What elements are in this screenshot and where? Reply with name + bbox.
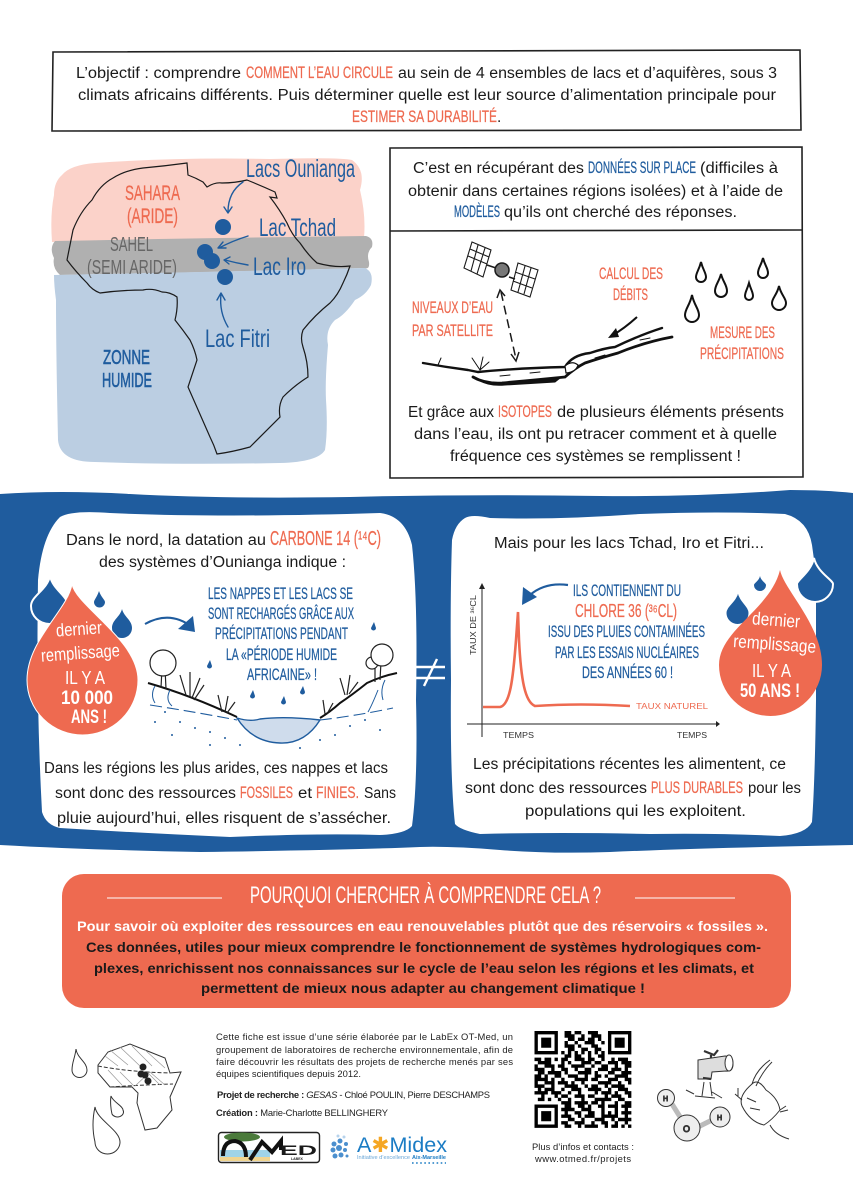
- panel: left card Ounianga: des systèmes d’Ounianga indique :: [99, 554, 346, 571]
- blue chlorine text: PAR LES ESSAIS NUCLÉAIRES: [555, 643, 699, 662]
- panel: right card chlorine: sont donc des ressources: [465, 780, 647, 797]
- panel: right card chlorine: Mais pour les lacs Tchad, Iro et Fitri...: [494, 535, 764, 552]
- illustration: river: [423, 328, 672, 385]
- panel: left card Ounianga: Sans: [364, 785, 396, 802]
- panel: right card chlorine: populations qui les exploitent.: [525, 803, 746, 820]
- icon: small Africa with drops: [72, 1044, 181, 1154]
- zone labels: (ARIDE): [127, 205, 178, 228]
- panel: left card Ounianga: FINIES.: [316, 783, 359, 802]
- icon: red drop: [719, 570, 822, 716]
- panel: data and models: fréquence ces systèmes se remplissent !: [450, 448, 741, 465]
- icon: red drop: IL Y A: [752, 661, 791, 681]
- blue humid zone: [54, 268, 372, 464]
- logo: A*Midex: A✱Midex: [357, 1134, 447, 1157]
- logo: A*Midex: [330, 1134, 447, 1163]
- icon: tap, water molecule and root: [658, 1050, 789, 1141]
- panel: why understand: [62, 874, 791, 1008]
- icon: red drop: remplissage: [40, 640, 120, 666]
- icon: red drop: remplissage: [733, 631, 817, 657]
- text block: credits: équipes scientifiques depuis 2012.: [216, 1068, 361, 1079]
- panel: data and models: C’est en récupérant des: [413, 160, 584, 177]
- icon: red drop: [27, 584, 138, 735]
- chart: chlorine 36 level: TEMPS: [677, 731, 707, 740]
- zone labels: SAHARA: [125, 182, 180, 205]
- Africa outline: [67, 163, 350, 454]
- blue explanation text: PRÉCIPITATIONS PENDANT: [215, 624, 348, 643]
- panel: data and models: dans l’eau, ils ont pu retracer comment et à quelle: [414, 426, 777, 443]
- panel: data and models: MODÈLES: [454, 202, 500, 221]
- lake labels: Lac Iro: [253, 253, 306, 281]
- illustration labels: [412, 264, 784, 363]
- blue explanation text: LA «PÉRIODE HUMIDE: [226, 645, 337, 664]
- lake markers: [197, 219, 233, 285]
- panel: left card Ounianga: CARBONE 14 (¹⁴C): [270, 528, 381, 550]
- blue chlorine text: ILS CONTIENNENT DU: [573, 581, 681, 600]
- chart: chlorine 36 level: [467, 583, 720, 740]
- panel: data and models: DONNÉES SUR PLACE: [588, 158, 696, 177]
- panel: left card Ounianga: Dans les régions les plus arides, ces nappes et lacs: [44, 760, 388, 777]
- panel: objective: ESTIMER SA DURABILITÉ: [352, 107, 497, 126]
- zone labels: ZONNE: [103, 347, 150, 369]
- lake labels: Lac Fitri: [205, 325, 270, 353]
- illustration: lake landscape: [148, 622, 397, 749]
- blue explanation text: AFRICAINE» !: [247, 665, 317, 684]
- blue chlorine text: DES ANNÉES 60 !: [582, 663, 673, 682]
- blue explanation text: SONT RECHARGÉS GRÂCE AUX: [208, 604, 354, 623]
- blue chlorine text: [548, 581, 705, 682]
- illustration labels: CALCUL DES: [599, 264, 663, 283]
- blue explanation text: LES NAPPES ET LES LACS SE: [208, 584, 353, 603]
- panel: why understand: Pour savoir où exploiter des ressources en eau renouvelables plutôt que des réservoirs « fossiles ».: [77, 918, 768, 934]
- zone labels: (SEMI ARIDE): [87, 257, 177, 279]
- grey Sahel zone: [52, 236, 372, 275]
- logo: OT-Med: ED: [280, 1142, 317, 1158]
- icon: blue drops behind: [31, 576, 132, 638]
- panel: why understand: plexes, enrichissent nos connaissances sur le cycle de l’eau selon les régions et les climats, et: [94, 960, 754, 976]
- icon: tap, water molecule and root: H: [663, 1096, 668, 1103]
- panel: left card Ounianga: pluie aujourd’hui, elles risquent de s’assécher.: [57, 810, 391, 827]
- chart: chlorine 36 level: TAUX NATUREL: [636, 702, 709, 711]
- panel: left card Ounianga: sont donc des ressources: [55, 785, 236, 802]
- panel: data and models: [390, 147, 803, 478]
- zone labels: SAHEL: [110, 234, 153, 256]
- icon: red drop: dernier: [752, 608, 801, 632]
- icon: red drop: dernier: [55, 617, 103, 641]
- lake labels: Lacs Ounianga: [246, 155, 355, 183]
- illustration labels: DÉBITS: [613, 285, 648, 304]
- icon: rain drops: [685, 258, 786, 322]
- pink Sahara zone: [51, 158, 364, 242]
- panel: left card Ounianga: FOSSILES: [240, 783, 293, 802]
- icon: tap, water molecule and root: H: [717, 1115, 722, 1122]
- panel: objective: climats africains différents. Puis déterminer quelle est leur source d’alimentation principale pour: [78, 87, 776, 104]
- logo: OT-Med: [218, 1132, 320, 1162]
- logo: A*Midex: Initiative d’excellence: [357, 1155, 410, 1161]
- icon: blue drops: [726, 558, 833, 624]
- logo: OT-Med: LABEX: [291, 1157, 304, 1161]
- panel: data and models: obtenir dans certaines régions isolées) et à l’aide de: [408, 183, 783, 200]
- panel: data and models: Et grâce aux: [408, 404, 494, 421]
- panel: left card Ounianga: [27, 512, 416, 837]
- QR code: [534, 1033, 631, 1126]
- arrow: satellite to river: [497, 290, 519, 361]
- text block: credits: Création : Marie-Charlotte BELLINGHERY: [216, 1107, 389, 1118]
- panel: why understand: Ces données, utiles pour mieux comprendre le fonctionnement de systèmes hydrologiques com-: [86, 939, 761, 955]
- panel: right card chlorine: PLUS DURABLES: [651, 778, 743, 797]
- panel: objective: L’objectif : comprendre: [76, 65, 241, 82]
- icon: red drop: ANS !: [71, 707, 107, 728]
- panel: objective: au sein de 4 ensembles de lacs et d’aquifères, sous 3: [398, 65, 777, 82]
- panel: left card Ounianga: et: [298, 785, 313, 802]
- blue band: [0, 490, 853, 853]
- zone labels: [87, 182, 180, 392]
- arrow: drop to explanation: [145, 616, 195, 632]
- panel: climate map of Africa: [51, 155, 372, 464]
- panel: why understand: POURQUOI CHERCHER À COMPRENDRE CELA ?: [250, 882, 601, 909]
- lake labels: Lac Tchad: [259, 214, 336, 242]
- QR caption: Plus d’infos et contacts :: [532, 1141, 634, 1152]
- panel: objective: .: [497, 109, 501, 126]
- text block: credits: Projet de recherche : GESAS - Chloé POULIN, Pierre DESCHAMPS: [217, 1089, 490, 1100]
- panel: objective: [52, 50, 801, 131]
- illustration labels: NIVEAUX D’EAU: [412, 298, 493, 317]
- lake labels: [205, 155, 355, 353]
- chart: chlorine 36 level: TEMPS: [503, 731, 534, 740]
- illustration labels: PRÉCIPITATIONS: [700, 344, 784, 363]
- icon: red drop: IL Y A: [65, 668, 105, 688]
- icon: satellite: [464, 242, 538, 297]
- text block: credits: [216, 1031, 513, 1118]
- panel: left card Ounianga: Dans le nord, la datation au: [66, 532, 266, 549]
- text block: credits: groupement de laboratoires de recherche environnementale, afin de: [216, 1044, 513, 1055]
- panel: objective: COMMENT L’EAU CIRCULE: [246, 63, 393, 82]
- illustration labels: PAR SATELLITE: [412, 321, 493, 340]
- blue explanation text: [208, 584, 354, 684]
- blue chlorine text: ISSU DES PLUIES CONTAMINÉES: [548, 622, 705, 641]
- panel: data and models: ISOTOPES: [498, 402, 552, 421]
- arrow: flow: [608, 317, 637, 338]
- zone labels: HUMIDE: [102, 370, 152, 392]
- icon: red drop: 10 000: [61, 688, 113, 709]
- QR caption: [532, 1141, 634, 1164]
- panel: why understand: permettent de mieux nous adapter au changement climatique !: [201, 980, 645, 996]
- illustration labels: MESURE DES: [710, 323, 775, 342]
- panel: data and models: qu’ils ont cherché des réponses.: [504, 204, 737, 221]
- icon: red drop: 50 ANS !: [740, 681, 800, 702]
- lake arrows: [217, 182, 248, 327]
- arrow: to peak: [522, 584, 568, 605]
- panel: data and models: de plusieurs éléments présents: [557, 404, 784, 421]
- not-equal sign: [416, 659, 445, 686]
- text block: credits: Cette fiche est issue d’une série élaborée par le LabEx OT-Med, un: [216, 1031, 513, 1042]
- panel: right card chlorine: pour les: [748, 780, 801, 797]
- blue chlorine text: CHLORE 36 (³⁶CL): [575, 601, 677, 621]
- icon: tap, water molecule and root: O: [683, 1124, 690, 1134]
- logo: A*Midex: Aix-Marseille: [412, 1155, 446, 1161]
- chart: chlorine 36 level: TAUX DE ³⁶CL: [469, 594, 478, 655]
- panel: right card chlorine: Les précipitations récentes les alimentent, ce: [473, 756, 786, 773]
- panel: right card chlorine: [451, 512, 833, 836]
- QR caption: www.otmed.fr/projets: [534, 1153, 631, 1164]
- text block: credits: faire découvrir les résultats des projets de recherche menés par ses: [216, 1056, 513, 1067]
- panel: data and models: (difficiles à: [700, 160, 778, 177]
